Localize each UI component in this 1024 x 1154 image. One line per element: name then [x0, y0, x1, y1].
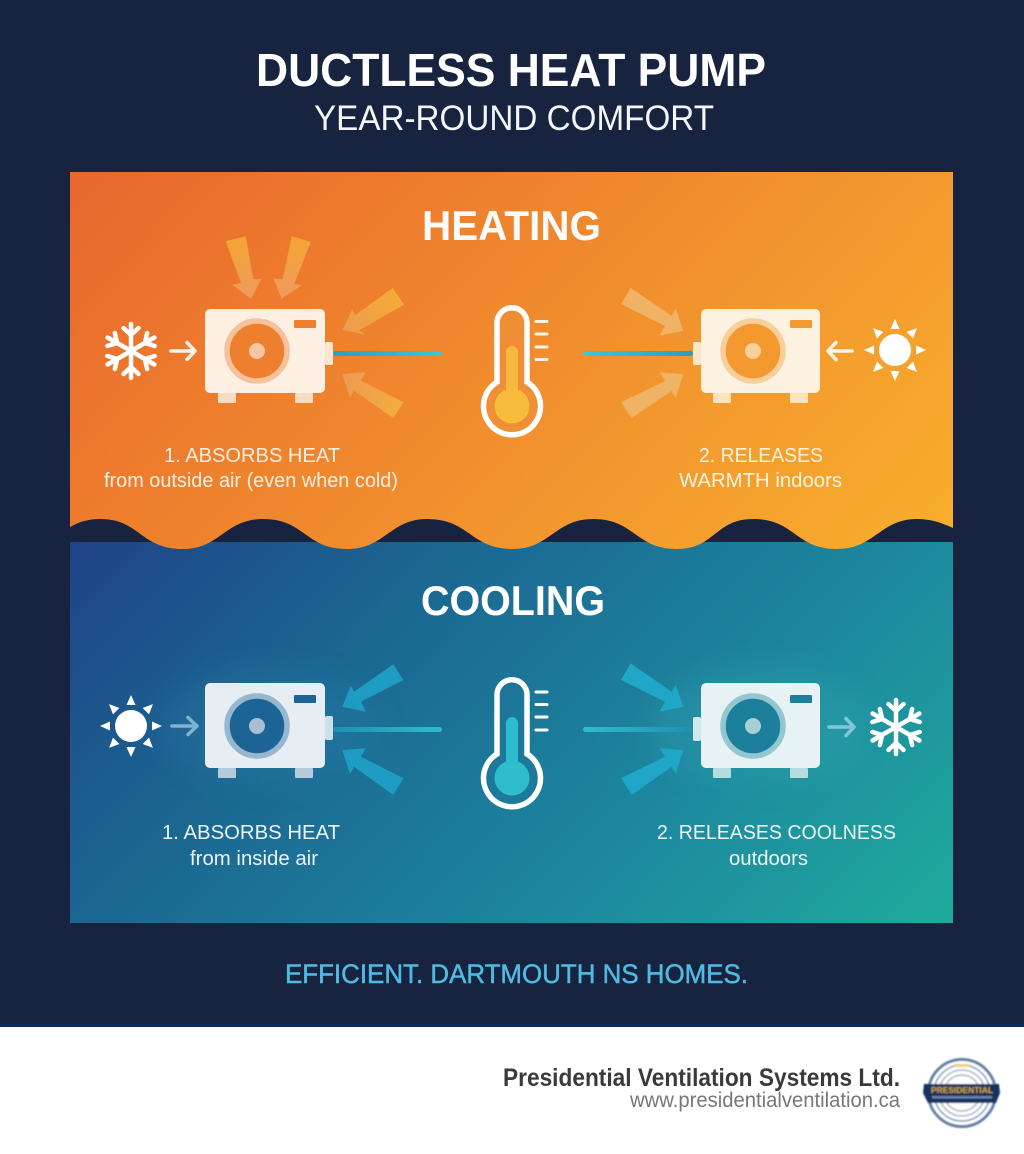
arrow: snowflake to unit	[171, 342, 195, 360]
company name and website: Presidential Ventilation Systems Ltd.	[503, 1064, 900, 1092]
title: YEAR-ROUND COMFORT	[314, 99, 714, 138]
arrow: unit to snowflake	[829, 718, 854, 736]
heading: cooling: COOLING	[421, 577, 605, 624]
icon: thermometer	[484, 308, 547, 435]
arrows: right of left unit	[342, 288, 404, 418]
footer band	[0, 1024, 1024, 1154]
text: heating step 2	[679, 445, 842, 492]
icon: right unit	[693, 683, 820, 778]
panel: heating	[70, 172, 953, 549]
arrow: sun to unit	[172, 718, 197, 734]
heading: heating: HEATING	[422, 202, 601, 249]
tagline: EFFICIENT. DARTMOUTH NS HOMES.	[285, 959, 748, 989]
panel: cooling	[70, 542, 953, 923]
text: cooling step 1: from inside air	[190, 848, 318, 870]
text: heating step 1: from outside air (even when cold)	[104, 470, 398, 492]
logo	[923, 1060, 1000, 1126]
arrows: above left unit	[226, 236, 311, 299]
arrows: into right unit	[621, 663, 683, 795]
title	[256, 44, 766, 138]
icon: left unit	[205, 309, 333, 403]
icon: right unit	[693, 309, 820, 403]
arrow: sun to unit	[828, 342, 852, 360]
text: cooling step 2	[657, 822, 896, 870]
icon: left pipe	[333, 727, 442, 732]
logo: PRESIDENTIAL	[931, 1086, 993, 1095]
text: heating step 1	[104, 445, 398, 492]
text: heating step 2: 2. RELEASES	[699, 445, 823, 467]
arrows: into left unit	[342, 664, 403, 795]
text: heating step 1: 1. ABSORBS HEAT	[164, 445, 340, 467]
icon: left unit	[205, 683, 333, 778]
icon: sun	[864, 319, 926, 381]
company name and website: www.presidentialventilation.ca	[629, 1089, 900, 1112]
text: heating step 2: WARMTH indoors	[679, 470, 842, 492]
company name and website	[503, 1064, 900, 1112]
icon: thermometer	[484, 680, 547, 807]
icon: snowflake	[869, 700, 923, 754]
icon: snowflake	[104, 324, 158, 378]
title: DUCTLESS HEAT PUMP	[256, 44, 766, 96]
icon: right pipe	[583, 351, 693, 356]
icon: left pipe	[333, 351, 442, 356]
text: cooling step 2: 2. RELEASES COOLNESS	[657, 822, 896, 844]
text: cooling step 1	[162, 822, 340, 870]
icon: right pipe	[583, 727, 693, 732]
text: cooling step 1: 1. ABSORBS HEAT	[162, 822, 340, 844]
icon: sun	[100, 695, 162, 757]
arrows: left of right unit	[621, 288, 683, 418]
text: cooling step 2: outdoors	[729, 848, 808, 870]
